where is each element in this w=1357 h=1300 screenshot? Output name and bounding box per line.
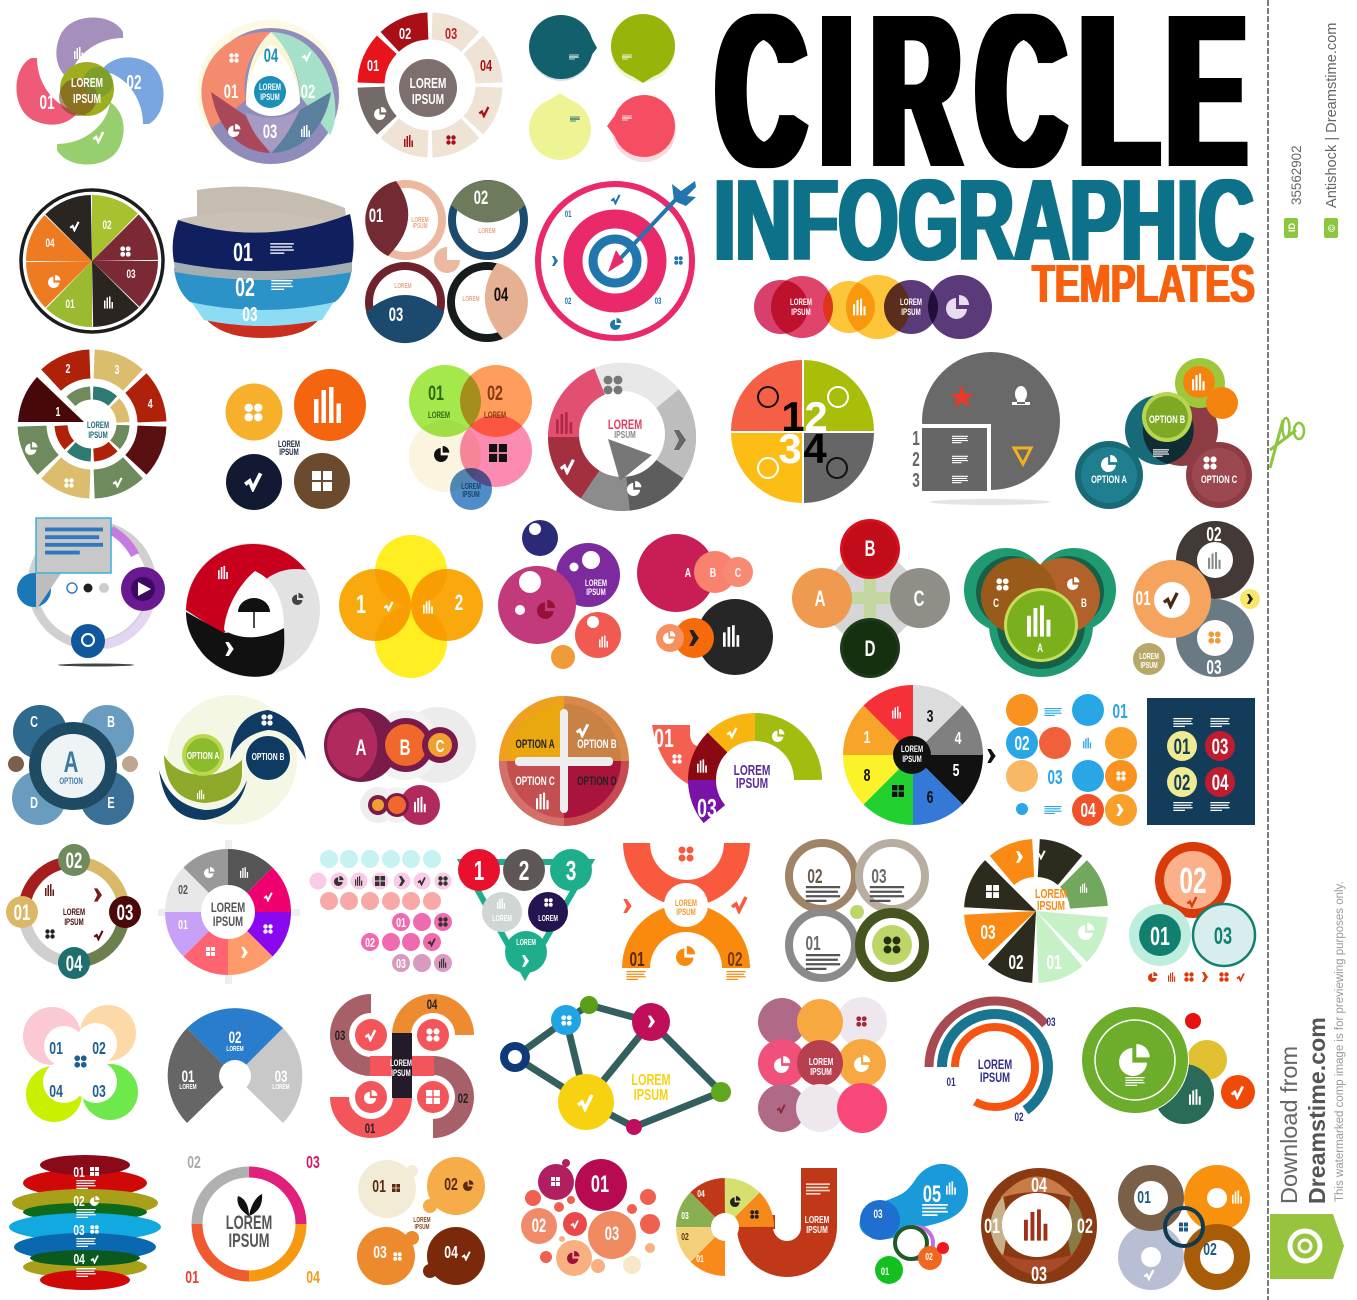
graphic 40: four crescent circles: 02 [92, 1039, 106, 1059]
graphic 38: segmented pie with lorem ipsum: 02 [1008, 951, 1024, 974]
graphic 22: three-lobed green circle: B [1081, 598, 1087, 611]
graphic 28: arch with numbered segments: IPSUM [736, 774, 768, 792]
graphic 26: crimson and glass circles A B C [324, 707, 476, 825]
graphic 9: ring with inner ring and triangle: 1 [56, 405, 60, 420]
graphic 28: arch with numbered segments [652, 705, 830, 855]
icon: scissors [1270, 418, 1304, 468]
graphic 36: X of two arches: 01 [630, 948, 645, 971]
graphic 49: four blob circles: LOREM [413, 1217, 431, 1224]
graphic 14: grey circle with list card: 2 [912, 448, 920, 471]
graphic 1: swirl with four petals: 01 [40, 91, 55, 114]
graphic 14: grey circle with list card: 3 [912, 469, 920, 492]
graphic 12: grey and crimson ring [548, 363, 696, 511]
graphic 51: half pie leading into U ribbon: 03 [681, 1210, 689, 1221]
graphic 28: arch with numbered segments: LOREM [734, 761, 770, 779]
graphic 41: three-blade fan: 03 [275, 1068, 287, 1087]
graphic 53: brown ring with bars [981, 1168, 1097, 1286]
graphic 23: three numbered circles [1133, 521, 1260, 679]
graphic 32: four-node arrow ring: 02 [66, 848, 82, 873]
graphic 29: puzzle colour wheel: 1 [864, 728, 871, 748]
graphic 22: three-lobed green circle [964, 548, 1116, 677]
graphic 22: three-lobed green circle: A [1037, 643, 1044, 656]
graphic 29: puzzle colour wheel: 5 [953, 761, 960, 781]
graphic 32: four-node arrow ring [6, 844, 141, 979]
graphic 18: four-lobed flower [339, 535, 483, 678]
graphic 8: target with arrow [538, 181, 696, 338]
graphic 40: four crescent circles: 04 [49, 1082, 63, 1102]
graphic 38: segmented pie with lorem ipsum: 03 [980, 921, 996, 944]
graphic 45: concentric arcs: LOREM [978, 1056, 1012, 1073]
graphic 18: four-lobed flower: 1 [356, 590, 366, 619]
graphic 47: stacked ellipses: 02 [73, 1192, 85, 1210]
graphic 42: four-arm pinwheel: 03 [335, 1027, 346, 1044]
graphic 18: four-lobed flower: 2 [455, 590, 463, 615]
graphic 36: X of two arches: 02 [727, 948, 743, 971]
graphic 21: four glass option circles with plus [792, 519, 950, 678]
graphic 33: eight-sector lorem ipsum wheel: 02 [178, 883, 188, 898]
graphic 30: small circles grid with numbers: 01 [1113, 700, 1128, 723]
graphic 43: connected node network: LOREM [631, 1071, 671, 1089]
graphic 33: eight-sector lorem ipsum wheel [158, 840, 300, 984]
graphic 6: layered 3D bowl: 01 [233, 238, 253, 267]
graphic 31: navy card with four numbers: 03 [1212, 734, 1228, 759]
graphic 46: green circle cluster [1081, 1006, 1255, 1124]
graphic 2: overlapping lens circle: 03 [263, 122, 277, 143]
graphic 30: small circles grid with numbers: 03 [1047, 766, 1063, 789]
graphic 41: three-blade fan: LOREM [179, 1084, 197, 1091]
graphic 21: four glass option circles with plus: B [865, 536, 875, 561]
graphic 41: three-blade fan: LOREM [226, 1046, 244, 1053]
graphic 33: eight-sector lorem ipsum wheel: 01 [178, 918, 188, 933]
graphic 31: navy card with four numbers [1147, 698, 1255, 825]
graphic 52: blue blob with ring and green node: 03 [874, 1209, 883, 1222]
graphic 49: four blob circles: 03 [373, 1243, 387, 1263]
graphic 29: puzzle colour wheel [864, 706, 962, 808]
graphic 13: four-quadrant pie with numbers: 4 [803, 425, 827, 472]
graphic 24: blue four-lobed option ring: E [107, 794, 115, 812]
graphic 1: swirl with four petals: IPSUM [73, 92, 101, 107]
graphic 47: stacked ellipses: 01 [73, 1163, 85, 1181]
graphic 7: four interlocking rings with lenses: LOREM [394, 283, 412, 290]
graphic 47: stacked ellipses: 04 [73, 1250, 86, 1268]
graphic 51: half pie leading into U ribbon: 04 [697, 1188, 705, 1199]
graphic 49: four blob circles: 02 [444, 1175, 458, 1195]
graphic 34: rows of small dots: 03 [396, 957, 406, 972]
graphic 32: four-node arrow ring: LOREM [63, 907, 85, 917]
graphic 3: segmented ring: IPSUM [412, 90, 444, 108]
graphic 50: scattered bubble cluster: 01 [591, 1171, 609, 1198]
graphic 32: four-node arrow ring: 04 [66, 951, 83, 976]
graphic 27: four option quadrant circle with cross: OPTION B [577, 739, 617, 752]
sidebar: image ID badge: ID [1287, 222, 1297, 232]
graphic 38: segmented pie with lorem ipsum: 01 [1047, 951, 1062, 974]
graphic 10: four icon circles: LOREM [278, 439, 300, 449]
title: TEMPLATES: TEMPLATES [1032, 254, 1255, 314]
title decoration: overlapping circles: LOREM [900, 297, 922, 307]
graphic 23: three numbered circles: 01 [1136, 587, 1151, 610]
sidebar: dashed cut line [1267, 0, 1269, 1300]
graphic 24: blue four-lobed option ring: B [107, 713, 115, 731]
graphic 45: concentric arcs: 01 [947, 1077, 956, 1090]
graphic 45: concentric arcs: 03 [1047, 1017, 1056, 1030]
graphic 7: four interlocking rings with lenses: 02 [474, 188, 488, 209]
graphic 11: venn of coloured circles: LOREM [428, 410, 450, 420]
sidebar: author credit: Antishock | Dreamstime.com [1324, 23, 1340, 208]
graphic 35: triangle of numbered circles: LOREM [492, 915, 512, 923]
graphic 35: triangle of numbered circles: 3 [566, 855, 576, 887]
graphic 7: four interlocking rings with lenses: 04 [494, 285, 508, 306]
graphic 33: eight-sector lorem ipsum wheel: LOREM [211, 899, 245, 916]
graphic 43: connected node network [500, 996, 731, 1135]
graphic 5: black-rimmed eight-slice pie [21, 190, 163, 332]
graphic 1: swirl with four petals: LOREM [71, 76, 103, 91]
graphic 54: four rings with navy centre ring: 02 [1203, 1240, 1217, 1260]
graphic 13: four-quadrant pie with numbers: 1 [781, 393, 805, 440]
graphic 6: layered 3D bowl [173, 187, 354, 338]
graphic 48: four-colour ring with leaf: 01 [185, 1268, 199, 1288]
graphic 9: ring with inner ring and triangle: 2 [66, 362, 70, 377]
sidebar: copyright badge: © [1327, 224, 1338, 232]
graphic 24: blue four-lobed option ring: C [30, 713, 38, 731]
graphic 5: black-rimmed eight-slice pie: 03 [127, 269, 136, 282]
graphic 29: puzzle colour wheel: 4 [955, 729, 962, 749]
graphic 47: stacked ellipses [9, 1155, 161, 1290]
graphic 30: small circles grid with numbers: 02 [1014, 732, 1030, 755]
graphic 49: four blob circles: 01 [372, 1177, 386, 1197]
graphic 48: four-colour ring with leaf: LOREM [226, 1213, 272, 1234]
graphic 39: three teal and red circles: 01 [1150, 922, 1170, 951]
graphic 2: overlapping lens circle: IPSUM [260, 92, 280, 102]
graphic 26: crimson and glass circles A B C: C [436, 737, 444, 757]
graphic 14: grey circle with list card [912, 352, 1060, 505]
graphic 37: four overlapping rings [789, 843, 925, 978]
graphic 3: segmented ring: 03 [445, 25, 457, 43]
graphic 7: four interlocking rings with lenses: IPSUM [412, 223, 428, 230]
graphic 41: three-blade fan: 02 [229, 1029, 241, 1048]
graphic 50: scattered bubble cluster: 03 [605, 1224, 619, 1245]
graphic 49: four blob circles [357, 1157, 485, 1285]
graphic 11: venn of coloured circles: LOREM [484, 410, 506, 420]
graphic 10: four icon circles: IPSUM [279, 447, 299, 457]
graphic 23: three numbered circles: 02 [1206, 523, 1222, 546]
graphic 24: blue four-lobed option ring: D [30, 794, 38, 812]
graphic 19: bubble cluster: LOREM [585, 578, 607, 588]
graphic 38: segmented pie with lorem ipsum: IPSUM [1037, 899, 1065, 914]
graphic 11: venn of coloured circles: 01 [428, 381, 444, 405]
graphic 9: ring with inner ring and triangle [7, 339, 177, 509]
graphic 11: venn of coloured circles: IPSUM [462, 491, 480, 499]
graphic 29: puzzle colour wheel: 8 [864, 766, 871, 786]
graphic 11: venn of coloured circles: 02 [487, 381, 503, 405]
graphic 9: ring with inner ring and triangle: 4 [148, 397, 153, 412]
sidebar: watermark note: This watermarked comp image is for previewing purposes only. [1334, 881, 1346, 1202]
graphic 38: segmented pie with lorem ipsum [961, 836, 1111, 986]
graphic 28: arch with numbered segments: 02 [794, 757, 814, 786]
graphic 10: four icon circles [226, 369, 366, 510]
graphic 16: ring with speech bubble and nodes [17, 518, 165, 666]
graphic 3: segmented ring: LOREM [410, 74, 446, 92]
graphic 7: four interlocking rings with lenses: LOREM [462, 296, 480, 303]
graphic 35: triangle of numbered circles: LOREM [538, 915, 558, 923]
graphic 7: four interlocking rings with lenses [365, 180, 528, 343]
graphic 51: half pie leading into U ribbon: LOREM [805, 1214, 829, 1225]
sidebar: green spiral logo tag [1270, 1214, 1344, 1279]
graphic 51: half pie leading into U ribbon: IPSUM [806, 1224, 828, 1235]
graphic 48: four-colour ring with leaf: IPSUM [229, 1231, 269, 1252]
graphic 24: blue four-lobed option ring: OPTION [59, 776, 83, 786]
graphic 21: four glass option circles with plus: D [865, 636, 875, 661]
graphic 27: four option quadrant circle with cross: OPTION C [515, 776, 555, 789]
graphic 29: puzzle colour wheel: 3 [927, 707, 933, 727]
graphic 7: four interlocking rings with lenses: LOREM [411, 217, 429, 224]
graphic 25: option A and B swirl: OPTION A [187, 750, 219, 761]
graphic 3: segmented ring: 01 [367, 57, 379, 75]
graphic 53: brown ring with bars: 04 [1031, 1173, 1047, 1197]
graphic 15: option circles cluster: OPTION A [1091, 472, 1127, 485]
sidebar: copyright badge [1324, 218, 1338, 238]
graphic 48: four-colour ring with leaf [185, 1153, 320, 1288]
graphic 44: nine overlapping circles: IPSUM [810, 1066, 832, 1077]
graphic 34: rows of small dots [310, 850, 452, 972]
graphic 26: crimson and glass circles A B C: A [356, 735, 367, 760]
graphic 34: rows of small dots: 01 [396, 916, 406, 931]
graphic 51: half pie leading into U ribbon [681, 1168, 830, 1264]
graphic 20: crimson and dark circles: C [735, 566, 741, 581]
graphic 1: swirl with four petals: 02 [126, 71, 142, 94]
graphic 41: three-blade fan [168, 1008, 302, 1123]
graphic 44: nine overlapping circles [758, 997, 887, 1133]
graphic 29: puzzle colour wheel: IPSUM [902, 754, 922, 764]
graphic 9: ring with inner ring and triangle: LOREM [87, 420, 109, 430]
graphic 8: target with arrow: 02 [565, 296, 571, 306]
graphic 23: three numbered circles: IPSUM [1140, 662, 1158, 670]
graphic 15: option circles cluster: OPTION B [1149, 412, 1185, 425]
graphic 6: layered 3D bowl: 03 [242, 303, 258, 326]
graphic 13: four-quadrant pie with numbers [731, 360, 874, 503]
graphic 35: triangle of numbered circles: LOREM [516, 939, 536, 947]
graphic 23: three numbered circles: LOREM [1139, 653, 1159, 661]
graphic 21: four glass option circles with plus: A [815, 586, 826, 611]
graphic 37: four overlapping rings: 01 [806, 932, 821, 955]
graphic 37: four overlapping rings: 03 [871, 865, 887, 888]
graphic 52: blue blob with ring and green node [860, 1164, 968, 1284]
graphic 39: three teal and red circles: 02 [1179, 860, 1207, 901]
graphic 15: option circles cluster: OPTION C [1201, 472, 1237, 485]
graphic 8: target with arrow: 03 [655, 296, 661, 306]
graphic 25: option A and B swirl [159, 695, 306, 825]
graphic 11: venn of coloured circles: LOREM [461, 483, 481, 491]
graphic 49: four blob circles: 04 [444, 1243, 458, 1263]
graphic 29: puzzle colour wheel: LOREM [901, 744, 923, 754]
graphic 7: four interlocking rings with lenses: 01 [369, 206, 383, 227]
graphic 19: bubble cluster: IPSUM [586, 587, 606, 597]
sidebar: download from text: Download from [1276, 1046, 1302, 1204]
graphic 4: four speech-bubble circles [529, 14, 676, 162]
graphic 42: four-arm pinwheel [335, 996, 469, 1137]
graphic 25: option A and B swirl: OPTION B [252, 751, 284, 762]
graphic 2: overlapping lens circle: LOREM [259, 82, 281, 92]
graphic 32: four-node arrow ring: 01 [14, 900, 30, 925]
graphic 13: four-quadrant pie with numbers: 3 [778, 425, 802, 472]
graphic 50: scattered bubble cluster [521, 1159, 660, 1276]
graphic 26: crimson and glass circles A B C: B [400, 735, 410, 760]
graphic 27: four option quadrant circle with cross: OPTION D [577, 776, 617, 789]
graphic 36: X of two arches: LOREM [675, 898, 697, 908]
graphic 24: blue four-lobed option ring: A [64, 746, 78, 779]
sidebar: Dreamstime.com text: Dreamstime.com [1304, 1017, 1330, 1204]
graphic 40: four crescent circles: 03 [92, 1082, 106, 1102]
graphic 49: four blob circles: IPSUM [414, 1224, 430, 1231]
graphic 31: navy card with four numbers: 02 [1174, 770, 1190, 795]
graphic 19: bubble cluster [498, 520, 621, 669]
title decoration: overlapping circles: IPSUM [791, 307, 811, 317]
graphic 35: triangle of numbered circles: 2 [519, 855, 529, 887]
graphic 53: brown ring with bars: 03 [1031, 1262, 1047, 1286]
graphic 23: three numbered circles: 03 [1206, 656, 1222, 679]
graphic 30: small circles grid with numbers [987, 694, 1137, 826]
graphic 47: stacked ellipses: 03 [73, 1221, 85, 1239]
graphic 41: three-blade fan: LOREM [272, 1084, 290, 1091]
graphic 41: three-blade fan: 01 [182, 1068, 194, 1087]
graphic 38: segmented pie with lorem ipsum: LOREM [1035, 887, 1067, 902]
graphic 42: four-arm pinwheel: 04 [427, 996, 438, 1013]
sidebar: image ID badge [1284, 218, 1298, 238]
graphic 35: triangle of numbered circles: 1 [474, 855, 484, 887]
graphic 42: four-arm pinwheel: 02 [458, 1090, 469, 1107]
graphic 3: segmented ring: 04 [480, 57, 492, 75]
graphic 36: X of two arches [622, 843, 750, 980]
graphic 21: four glass option circles with plus: C [914, 586, 925, 611]
graphic 28: arch with numbered segments: 01 [654, 724, 674, 753]
graphic 29: puzzle colour wheel: 6 [927, 788, 933, 808]
graphic 45: concentric arcs: 02 [1015, 1112, 1024, 1125]
graphic 7: four interlocking rings with lenses: LOREM [478, 228, 496, 235]
graphic 2: overlapping lens circle [197, 20, 341, 164]
graphic 42: four-arm pinwheel: LOREM [390, 1058, 412, 1068]
graphic 42: four-arm pinwheel: 01 [365, 1120, 376, 1137]
graphic 36: X of two arches: IPSUM [676, 907, 696, 917]
graphic 48: four-colour ring with leaf: 02 [187, 1153, 201, 1173]
graphic 11: venn of coloured circles [409, 365, 532, 510]
title decoration: overlapping circles [754, 275, 992, 339]
graphic 20: crimson and dark circles [637, 534, 773, 675]
graphic 27: four option quadrant circle with cross [499, 696, 629, 826]
graphic 17: red, black and grey umbrella circle [186, 543, 320, 677]
graphic 48: four-colour ring with leaf: 03 [306, 1153, 320, 1173]
graphic 30: small circles grid with numbers: 04 [1081, 799, 1096, 822]
graphic 3: segmented ring [347, 2, 513, 168]
graphic 13: four-quadrant pie with numbers: 2 [804, 393, 828, 440]
graphic 50: scattered bubble cluster: 02 [532, 1216, 546, 1237]
title decoration: overlapping circles: IPSUM [901, 307, 921, 317]
title: CIRCLE [717, 0, 1245, 213]
graphic 1: swirl with four petals [16, 17, 164, 165]
graphic 45: concentric arcs: IPSUM [980, 1069, 1010, 1086]
graphic 45: concentric arcs [929, 1001, 1061, 1133]
graphic 52: blue blob with ring and green node: 01 [881, 1264, 889, 1277]
graphic 39: three teal and red circles: 03 [1214, 923, 1232, 950]
graphic 20: crimson and dark circles: A [685, 566, 691, 581]
graphic 51: half pie leading into U ribbon: 02 [681, 1231, 689, 1242]
graphic 7: four interlocking rings with lenses: 03 [389, 305, 403, 326]
graphic 6: layered 3D bowl: 02 [235, 273, 255, 302]
graphic 53: brown ring with bars: 02 [1077, 1214, 1093, 1238]
graphic 27: four option quadrant circle with cross: OPTION A [516, 739, 555, 752]
graphic 31: navy card with four numbers: 04 [1212, 770, 1229, 795]
graphic 5: black-rimmed eight-slice pie: 02 [103, 220, 112, 233]
graphic 54: four rings with navy centre ring: 01 [1137, 1188, 1151, 1208]
graphic 34: rows of small dots: 02 [365, 936, 375, 951]
graphic 53: brown ring with bars: 01 [984, 1214, 1000, 1238]
graphic 2: overlapping lens circle: 04 [264, 46, 278, 67]
sidebar: image number: 35562902 [1289, 145, 1304, 205]
graphic 22: three-lobed green circle: C [993, 598, 1000, 611]
graphic 39: three teal and red circles [1129, 842, 1255, 982]
graphic 12: grey and crimson ring: LOREM [608, 416, 642, 433]
graphic 51: half pie leading into U ribbon: 01 [696, 1253, 704, 1264]
graphic 40: four crescent circles: 01 [49, 1039, 63, 1059]
graphic 9: ring with inner ring and triangle: 3 [115, 363, 119, 378]
graphic 42: four-arm pinwheel: IPSUM [391, 1068, 411, 1078]
graphic 12: grey and crimson ring: IPSUM [614, 429, 636, 440]
graphic 14: grey circle with list card: 1 [912, 427, 920, 450]
graphic 9: ring with inner ring and triangle: IPSUM [88, 430, 108, 440]
graphic 28: arch with numbered segments: 03 [697, 794, 717, 823]
graphic 2: overlapping lens circle: 02 [301, 82, 315, 103]
graphic 32: four-node arrow ring: 03 [117, 900, 133, 925]
graphic 8: target with arrow: 01 [565, 209, 572, 219]
graphic 54: four rings with navy centre ring [1118, 1165, 1250, 1290]
graphic 35: triangle of numbered circles [458, 849, 592, 975]
graphic 15: option circles cluster [1075, 358, 1252, 509]
title decoration: overlapping circles: LOREM [790, 297, 812, 307]
graphic 33: eight-sector lorem ipsum wheel: IPSUM [213, 913, 243, 930]
graphic 5: black-rimmed eight-slice pie: 01 [66, 299, 75, 312]
graphic 2: overlapping lens circle: 01 [224, 82, 238, 103]
graphic 43: connected node network: IPSUM [634, 1086, 668, 1104]
graphic 20: crimson and dark circles: B [710, 566, 716, 581]
graphic 32: four-node arrow ring: IPSUM [64, 917, 84, 927]
graphic 48: four-colour ring with leaf: 04 [306, 1268, 320, 1288]
graphic 3: segmented ring: 02 [399, 25, 411, 43]
graphic 24: blue four-lobed option ring [8, 705, 138, 825]
graphic 5: black-rimmed eight-slice pie: 04 [46, 238, 55, 251]
graphic 44: nine overlapping circles: LOREM [809, 1056, 833, 1067]
graphic 40: four crescent circles [23, 1005, 138, 1122]
graphic 52: blue blob with ring and green node: 05 [923, 1181, 941, 1208]
graphic 37: four overlapping rings: 02 [807, 865, 823, 888]
graphic 31: navy card with four numbers: 01 [1174, 734, 1190, 759]
graphic 52: blue blob with ring and green node: 02 [925, 1251, 933, 1262]
